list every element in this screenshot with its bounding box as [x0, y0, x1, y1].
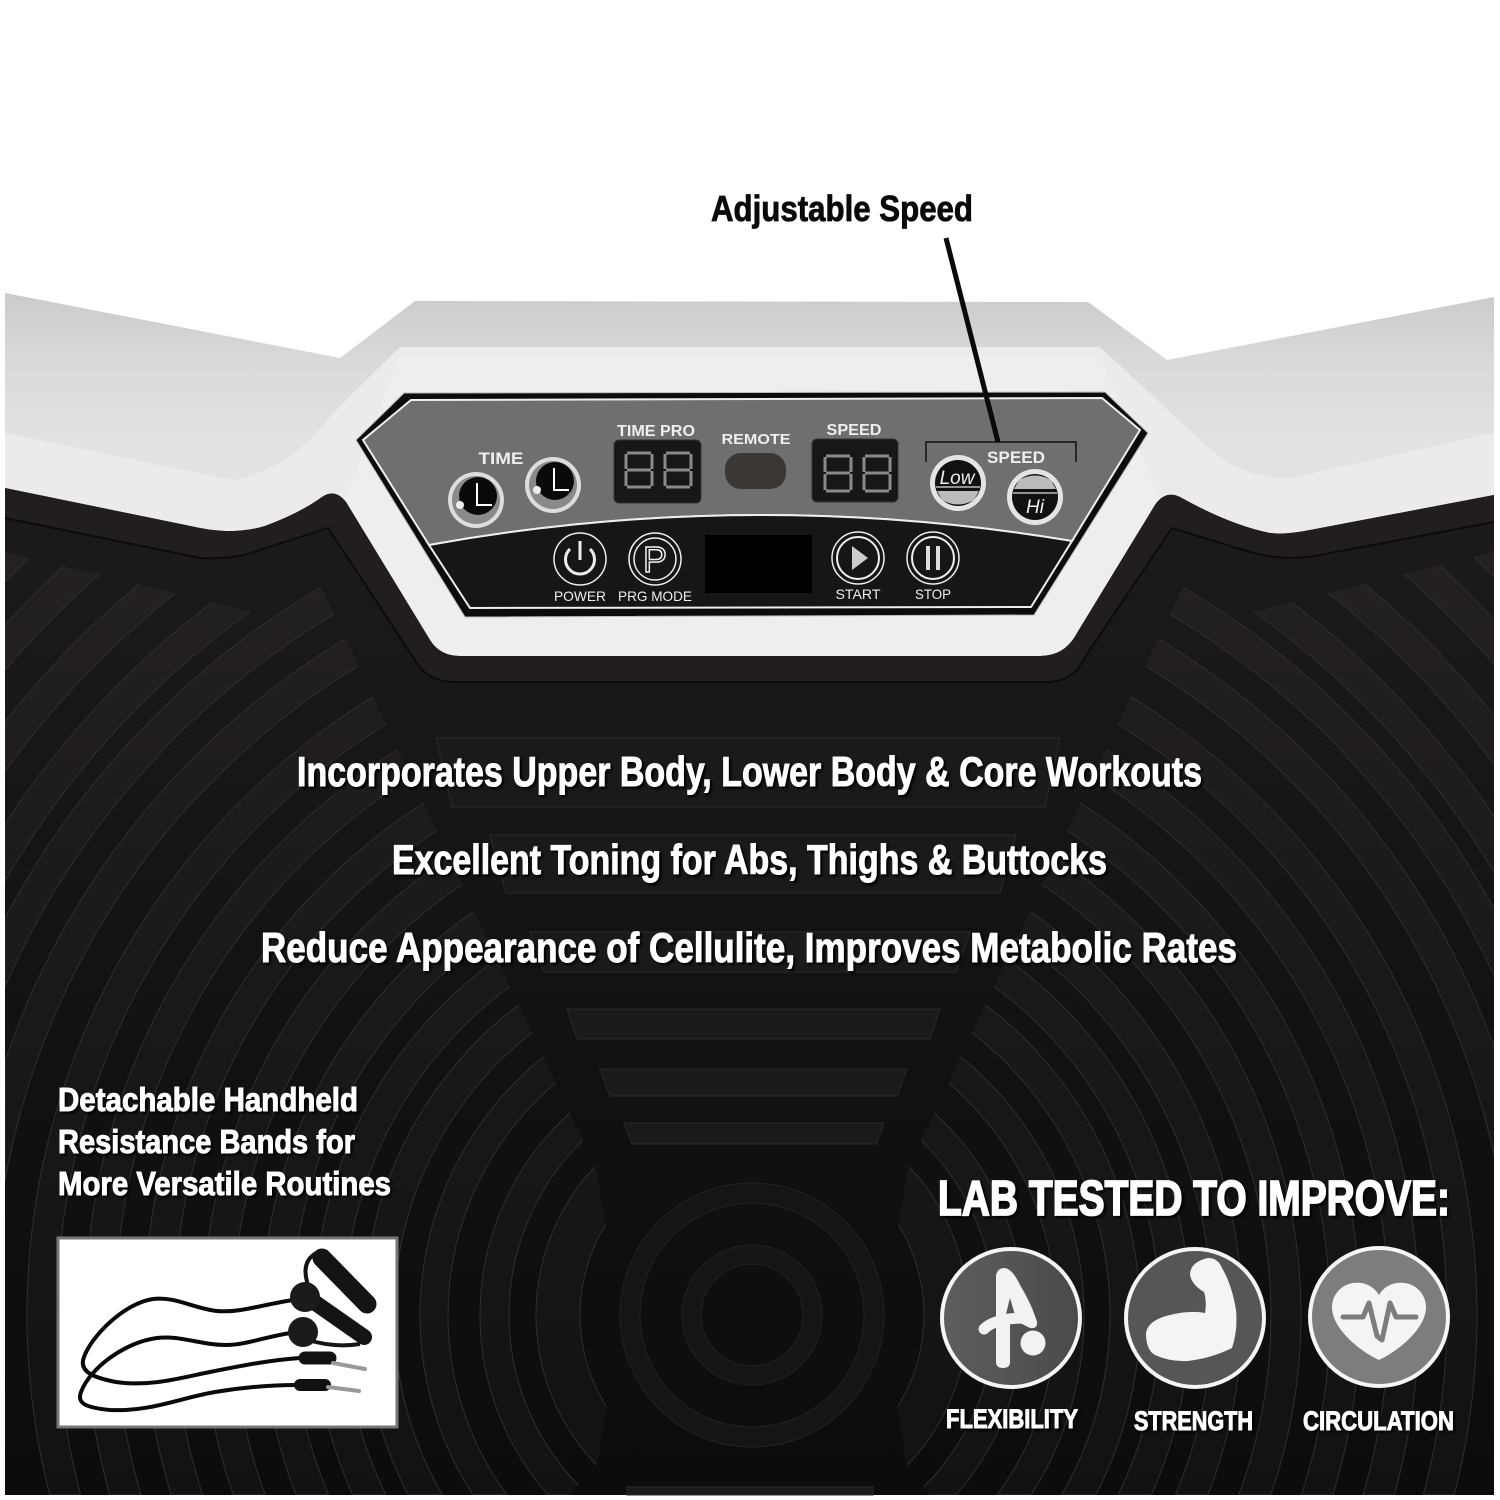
button labels: START — [836, 586, 881, 602]
icon: flexibility — [942, 1249, 1080, 1387]
button labels: POWER — [554, 588, 606, 604]
button: low: Low — [940, 468, 976, 489]
resistance bands text: Detachable Handheld — [58, 1081, 358, 1118]
button labels — [554, 586, 951, 604]
icon: handles — [288, 1252, 367, 1347]
label: flexibility: FLEXIBILITY — [946, 1404, 1078, 1434]
button: low — [930, 455, 986, 511]
label: SPEED buttons: SPEED — [987, 448, 1045, 467]
icon: strength — [1126, 1249, 1264, 1387]
icon: plugs — [300, 1358, 365, 1391]
benefit text lines: Reduce Appearance of Cellulite, Improves Metabolic Rates — [261, 924, 1237, 971]
device: white housing — [5, 293, 1494, 656]
panel: resistance bands photo — [58, 1238, 397, 1427]
label: SPEED display: SPEED — [826, 422, 882, 439]
benefit text lines: Incorporates Upper Body, Lower Body & Core Workouts — [297, 748, 1202, 795]
remote sensor window — [725, 453, 786, 489]
arrow: callout line — [946, 238, 998, 442]
button: time minus — [448, 472, 504, 528]
label: TIME: TIME — [478, 449, 524, 468]
benefit text lines: Excellent Toning for Abs, Thighs & Buttocks — [392, 836, 1107, 883]
label: TIME PRO: TIME PRO — [617, 423, 695, 440]
display: speed — [812, 439, 898, 502]
label: REMOTE: REMOTE — [722, 431, 790, 448]
button: program — [629, 533, 681, 585]
resistance bands text: Resistance Bands for — [58, 1123, 355, 1160]
pad: centre rings — [620, 1183, 884, 1447]
black redaction block — [705, 535, 812, 593]
button: hi — [1007, 469, 1063, 525]
button: hi: Hi — [1026, 497, 1045, 518]
button: start — [832, 532, 884, 584]
device: black textured pad — [4, 488, 1494, 1496]
pad: concentric ridges — [5, 552, 1494, 1495]
label: strength: STRENGTH — [1134, 1406, 1253, 1436]
label: circulation: CIRCULATION — [1303, 1406, 1454, 1436]
display: time pro — [614, 440, 701, 503]
pad: horizontal bars — [436, 738, 1060, 1495]
icon: circulation — [1310, 1248, 1448, 1386]
button labels: PRG MODE — [618, 588, 692, 604]
button: stop — [907, 532, 959, 584]
callout: adjustable speed: Adjustable Speed — [711, 188, 973, 229]
button: program: P — [643, 539, 667, 580]
resistance bands text: More Versatile Routines — [58, 1165, 391, 1202]
benefit text lines — [261, 748, 1237, 971]
resistance bands text — [58, 1081, 391, 1202]
control panel — [356, 392, 1148, 617]
button labels: STOP — [915, 586, 951, 602]
button: power — [554, 533, 606, 585]
button: time plus — [525, 457, 581, 513]
icon: cords — [80, 1299, 300, 1410]
speed bracket — [926, 442, 1076, 462]
